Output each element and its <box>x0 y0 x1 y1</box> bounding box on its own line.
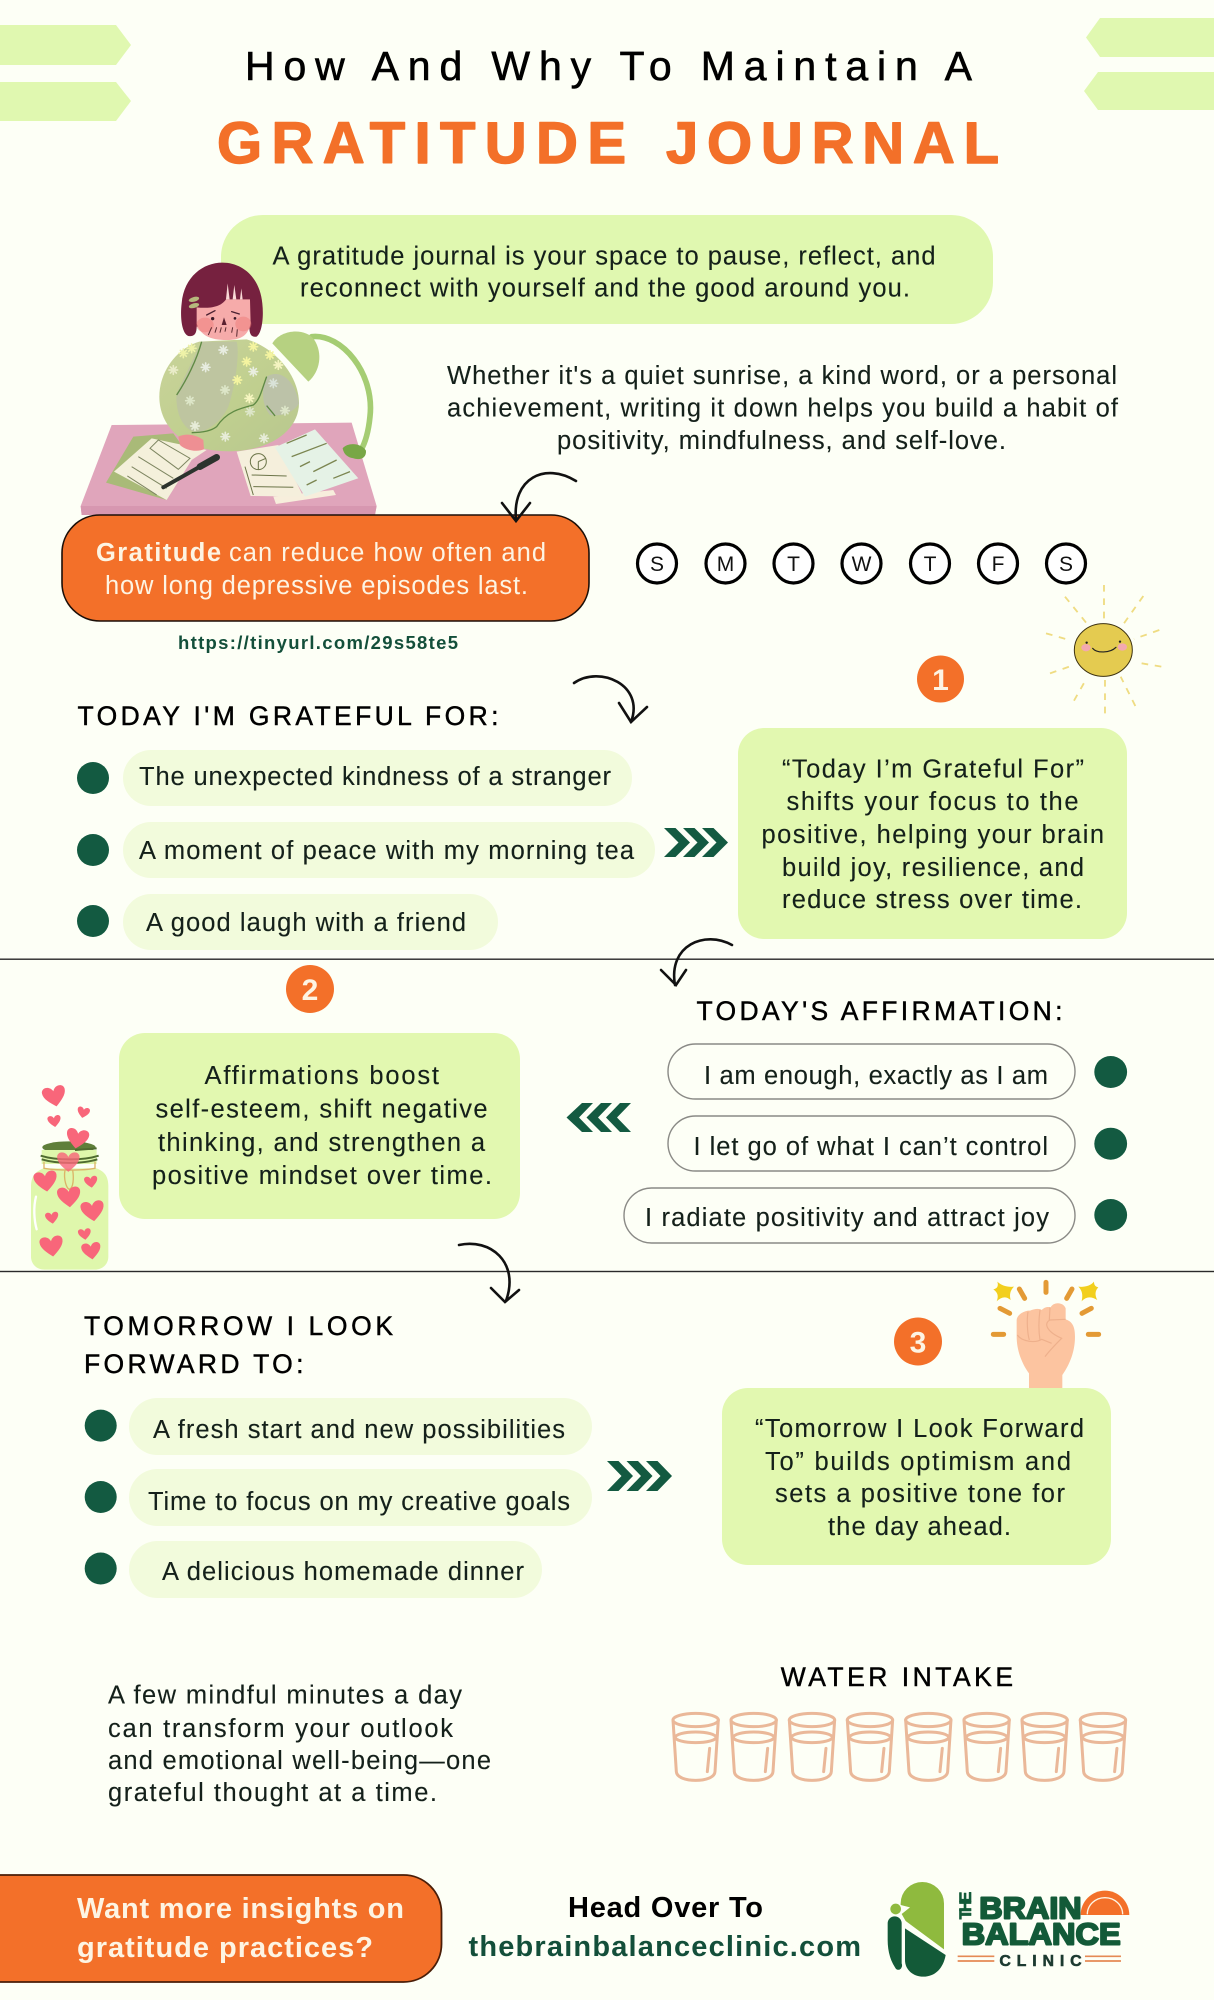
panel: step 1 explanation: “Today I’m Grateful For” <box>782 756 1084 784</box>
sleeve <box>176 342 238 433</box>
closing paragraph: grateful thought at a time. <box>108 1779 437 1807</box>
arrow: to affirmation heading <box>661 939 732 985</box>
intro callout <box>221 215 993 324</box>
sweater details and flowers <box>169 342 289 443</box>
step 1 badge: 1 <box>932 664 949 697</box>
week day tracker: T <box>787 553 800 576</box>
panel: step 2 explanation: self-esteem, shift negative <box>156 1096 488 1124</box>
panel: step 3 explanation <box>722 1388 1111 1565</box>
week day tracker: T <box>924 553 937 576</box>
paragraph: Whether it's a quiet sunrise, a kind word, or a personal <box>447 362 1117 390</box>
website text <box>468 1892 861 1963</box>
week day tracker: S <box>1059 553 1073 576</box>
step 3 badge: 3 <box>910 1326 926 1360</box>
illustration: girl at desk with journal and lamp <box>81 263 377 515</box>
heading: water intake: WATER INTAKE <box>781 1662 1013 1692</box>
pen <box>163 457 217 487</box>
paragraph: positivity, mindfulness, and self-love. <box>557 427 1006 455</box>
title: JOURNAL <box>666 111 999 176</box>
lamp <box>272 331 370 459</box>
panel: call to action: gratitude practices? <box>77 1932 373 1964</box>
panel: step 1 explanation: positive, helping your brain <box>762 821 1104 849</box>
icons: eight water glasses <box>673 1713 1126 1780</box>
arrow: to tomorrow heading <box>459 1244 519 1302</box>
panel: step 3 explanation: the day ahead. <box>828 1513 1011 1541</box>
list: affirmations: I am enough, exactly as I am <box>704 1062 1048 1090</box>
face <box>188 283 251 340</box>
panel: step 2 explanation <box>119 1033 520 1219</box>
paragraph: achievement, writing it down helps you build a habit of <box>447 394 1119 422</box>
step 1 badge <box>917 656 964 702</box>
arrow: chevrons to step 2 <box>566 1103 631 1132</box>
logo clinic line: CLINIC <box>999 1953 1082 1970</box>
right arm shade <box>263 374 299 415</box>
logo sun arc <box>1081 1891 1129 1915</box>
intro callout: A gratitude journal is your space to pause, reflect, and <box>272 242 936 270</box>
arrow: chevrons to step 1 <box>664 828 728 857</box>
panel: gratitude fact: can reduce how often and <box>229 539 546 567</box>
panel: step 2 explanation: positive mindset over time. <box>152 1162 492 1190</box>
hand <box>178 435 204 451</box>
title: GRATITUDE <box>217 111 626 176</box>
logo: The Brain Balance Clinic <box>888 1882 1129 1977</box>
list: grateful items <box>77 750 655 950</box>
heading: today's affirmation: TODAY'S AFFIRMATION: <box>696 996 1062 1026</box>
list: grateful items: A moment of peace with my morning tea <box>139 837 635 865</box>
closing paragraph: can transform your outlook <box>108 1715 453 1743</box>
step 2 badge <box>286 965 334 1013</box>
heading: today I'm grateful for: TODAY I'M GRATEFUL FOR: <box>78 701 498 731</box>
logo clinic line <box>958 1953 1121 1970</box>
step 2 badge: 2 <box>302 974 318 1007</box>
list: affirmations <box>624 1044 1127 1243</box>
arrow: to grateful heading <box>574 676 647 722</box>
list: affirmations: I radiate positivity and attract joy <box>645 1204 1049 1232</box>
right papers <box>237 429 358 504</box>
hair <box>181 263 263 337</box>
panel: step 1 explanation: reduce stress over time. <box>782 886 1082 914</box>
week day tracker: M <box>717 553 734 576</box>
desk <box>81 423 377 515</box>
list: tomorrow items: Time to focus on my creative goals <box>148 1488 570 1516</box>
decorative tag shapes: top right <box>1084 18 1214 110</box>
week day tracker: S <box>650 553 664 576</box>
panel: call to action <box>0 1875 442 1982</box>
icon: smiling sun <box>1046 585 1161 713</box>
source link: https://tinyurl.com/29s58te5 <box>178 632 458 653</box>
intro callout: reconnect with yourself and the good around you. <box>300 274 910 302</box>
panel: step 3 explanation: sets a positive tone for <box>775 1480 1066 1508</box>
divider line 2 <box>0 1271 1214 1272</box>
body <box>159 339 299 451</box>
week day tracker: W <box>852 553 872 576</box>
divider line 1 <box>0 958 1214 960</box>
left papers <box>106 433 207 500</box>
panel: step 1 explanation: build joy, resilience, and <box>782 854 1084 882</box>
website text: Head Over To <box>568 1892 763 1924</box>
closing paragraph <box>108 1682 491 1807</box>
list: tomorrow items: A delicious homemade dinner <box>162 1558 524 1586</box>
list: tomorrow items <box>85 1398 592 1598</box>
panel: gratitude fact: Gratitude <box>96 539 221 567</box>
list: affirmations: I let go of what I can’t control <box>694 1133 1048 1161</box>
logo wordmark: BRAIN <box>979 1891 1082 1925</box>
logo wordmark: THE <box>956 1892 975 1919</box>
logo wordmark <box>956 1891 1121 1951</box>
website text: thebrainbalanceclinic.com <box>468 1931 861 1963</box>
week day tracker <box>638 544 1086 583</box>
panel: step 1 explanation <box>738 728 1127 939</box>
panel: step 1 explanation: shifts your focus to the <box>786 788 1078 816</box>
paragraph <box>447 362 1119 455</box>
icon: heart jar <box>31 1084 108 1270</box>
water intake tracker <box>673 1662 1126 1780</box>
title: How And Why To Maintain A <box>245 43 973 89</box>
heading: tomorrow I look forward to: TOMORROW I LOOK <box>84 1311 393 1341</box>
week day tracker: F <box>992 553 1004 576</box>
logo wordmark: BALANCE <box>962 1917 1121 1951</box>
panel: step 3 explanation: To” builds optimism and <box>765 1448 1071 1476</box>
closing paragraph: and emotional well-being—one <box>108 1747 491 1775</box>
panel: step 3 explanation: “Tomorrow I Look Forward <box>755 1415 1084 1443</box>
icon: raised fist with stars <box>993 1282 1099 1388</box>
panel: call to action: Want more insights on <box>77 1893 404 1925</box>
heading: tomorrow I look forward to: FORWARD TO: <box>84 1349 304 1379</box>
list: grateful items: The unexpected kindness of a stranger <box>139 763 612 791</box>
title <box>217 43 999 176</box>
arrow: chevrons to step 3 <box>607 1461 672 1491</box>
panel: step 2 explanation: Affirmations boost <box>204 1062 439 1090</box>
decorative tag shapes: top left <box>0 25 131 121</box>
arrow: to gratitude fact <box>502 473 576 521</box>
closing paragraph: A few mindful minutes a day <box>108 1682 462 1710</box>
step 3 badge <box>894 1318 942 1366</box>
list: tomorrow items: A fresh start and new possibilities <box>153 1416 565 1444</box>
list: grateful items: A good laugh with a friend <box>146 909 466 937</box>
panel: step 2 explanation: thinking, and strengthen a <box>158 1129 486 1157</box>
logo mark <box>888 1882 946 1977</box>
panel: gratitude fact <box>62 515 589 621</box>
panel: gratitude fact: how long depressive episodes last. <box>105 572 528 600</box>
heading: tomorrow I look forward to <box>84 1311 393 1379</box>
